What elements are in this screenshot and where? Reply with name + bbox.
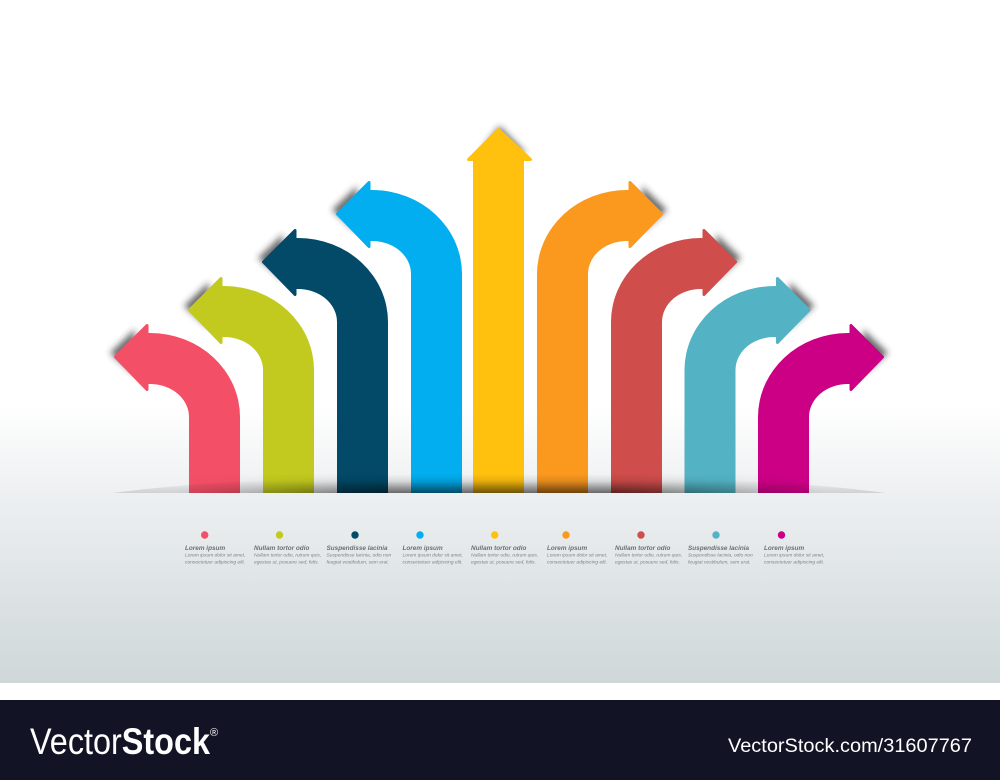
legend item 1: consectetuer adipiscing elit. bbox=[185, 560, 245, 566]
legend item 2: Nullam tortor odio bbox=[254, 545, 309, 552]
legend item 1 bbox=[185, 531, 245, 566]
legend item 7: Nullam tortor odio bbox=[615, 545, 670, 552]
legend item 3: Suspendisse lacinia, odio non bbox=[326, 552, 391, 558]
arrow 4: blue, pointing left bbox=[332, 182, 462, 493]
legend item 1: Lorem ipsum bbox=[185, 545, 225, 552]
legend item 3: feugiat vestibulum, sem erat. bbox=[326, 560, 389, 566]
arrow 3: navy, pointing left bbox=[258, 230, 388, 493]
legend item 4 bbox=[402, 531, 463, 566]
legend item 6: Lorem ipsum bbox=[547, 545, 587, 552]
legend item 9: consectetuer adipiscing elit. bbox=[764, 560, 824, 566]
legend bbox=[185, 531, 824, 566]
legend item 2: Nullam tortor odio, rutrum quis, bbox=[254, 552, 321, 558]
legend item 6: Lorem ipsum dolor sit amet, bbox=[547, 552, 607, 558]
logo wordmark: VectorStock bbox=[30, 721, 210, 762]
arrow 5: yellow, pointing up bbox=[468, 126, 530, 493]
registered mark: ® bbox=[210, 727, 218, 739]
legend item 2: egestas ut, posuere sed, felis. bbox=[254, 560, 319, 566]
legend item 2 bbox=[254, 531, 321, 566]
legend item 9 bbox=[764, 531, 824, 566]
image id: VectorStock.com/31607767 bbox=[728, 736, 972, 757]
arrow 6: orange, pointing right bbox=[537, 182, 667, 493]
floor shadow behind the panel edge bbox=[114, 476, 885, 493]
legend item 3 bbox=[326, 531, 391, 566]
legend item 7: Nullam tortor odio, rutrum quis, bbox=[615, 552, 682, 558]
legend item 7 bbox=[615, 531, 682, 566]
arrow 9: magenta, pointing right bbox=[758, 326, 888, 493]
arrow 8: teal, pointing right bbox=[684, 278, 814, 493]
legend item 6: consectetuer adipiscing elit. bbox=[547, 560, 607, 566]
legend item 4: consectetuer adipiscing elit. bbox=[402, 560, 463, 566]
legend item 9: Lorem ipsum bbox=[764, 545, 804, 552]
lower panel bbox=[0, 493, 1000, 683]
legend item 8: Suspendisse lacinia bbox=[688, 545, 750, 552]
legend item 9: Lorem ipsum dolor sit amet, bbox=[764, 552, 824, 558]
legend item 1: Lorem ipsum dolor sit amet, bbox=[185, 552, 245, 558]
arrow 1: pink, pointing left bbox=[110, 326, 240, 493]
legend item 5: Nullam tortor odio, rutrum quis, bbox=[471, 552, 538, 558]
legend item 8: feugiat vestibulum, sem erat. bbox=[688, 560, 751, 566]
legend item 4: Lorem ipsum dolor sit amet, bbox=[402, 552, 463, 558]
watermark bar bbox=[0, 700, 1000, 780]
legend item 7: egestas ut, posuere sed, felis. bbox=[615, 560, 680, 566]
legend item 5 bbox=[471, 531, 538, 566]
legend item 3: Suspendisse lacinia bbox=[326, 545, 388, 552]
legend item 5: egestas ut, posuere sed, felis. bbox=[471, 560, 536, 566]
legend item 8: Suspendisse lacinia, odio non bbox=[688, 552, 753, 558]
arrow 7: red, pointing right bbox=[611, 230, 741, 493]
arrow 2: olive, pointing left bbox=[184, 278, 314, 493]
background bbox=[0, 0, 1000, 493]
legend item 4: Lorem ipsum bbox=[402, 545, 443, 552]
legend item 6 bbox=[547, 531, 607, 566]
legend item 8 bbox=[688, 531, 753, 566]
legend item 5: Nullam tortor odio bbox=[471, 545, 526, 552]
